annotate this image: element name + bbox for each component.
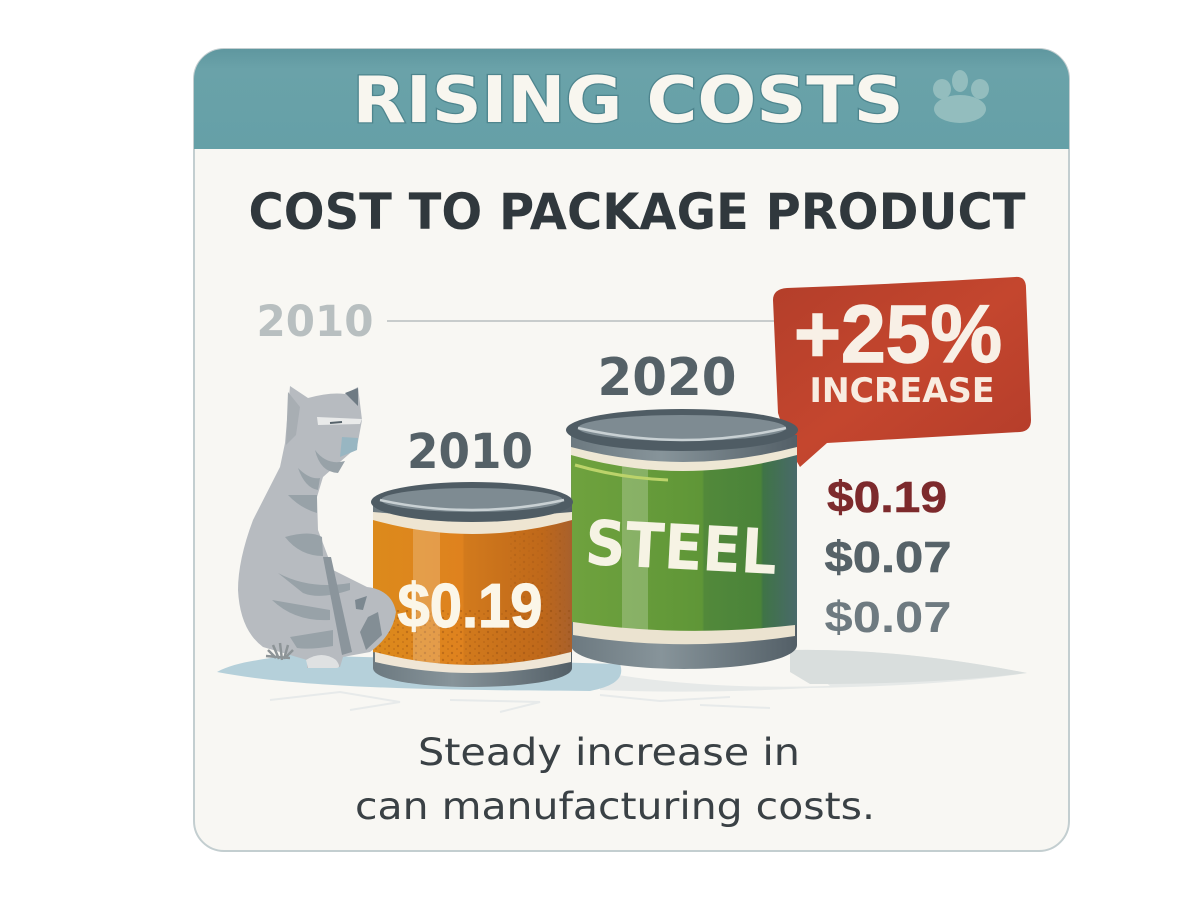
year label 2010: 2010	[407, 424, 533, 480]
title banner	[194, 49, 1069, 149]
timeline label 2010: 2010	[256, 297, 374, 347]
caption: Steady increase in	[418, 731, 800, 774]
icon: paw print	[933, 70, 989, 123]
callout: +25% increase: INCREASE	[810, 371, 994, 411]
price on can: $0.19	[398, 572, 542, 641]
year label 2020: 2020	[598, 348, 736, 408]
price list: $0.07	[824, 533, 952, 582]
2010 can	[371, 424, 573, 687]
price list	[824, 473, 952, 642]
panel: card	[194, 49, 1069, 851]
callout: +25% increase	[773, 277, 1031, 467]
title: RISING COSTS	[352, 64, 904, 138]
callout: +25% increase: +25%	[794, 289, 1002, 380]
ground shadow	[217, 650, 1027, 712]
caption: can manufacturing costs.	[355, 785, 875, 828]
heading: COST TO PACKAGE PRODUCT	[248, 183, 1026, 241]
caption	[355, 731, 875, 828]
can label STEEL: STEEL	[583, 506, 779, 589]
icon: grey tabby cat	[238, 386, 396, 668]
price list: $0.19	[827, 473, 947, 522]
2020 can	[566, 348, 798, 669]
price list: $0.07	[824, 593, 952, 642]
